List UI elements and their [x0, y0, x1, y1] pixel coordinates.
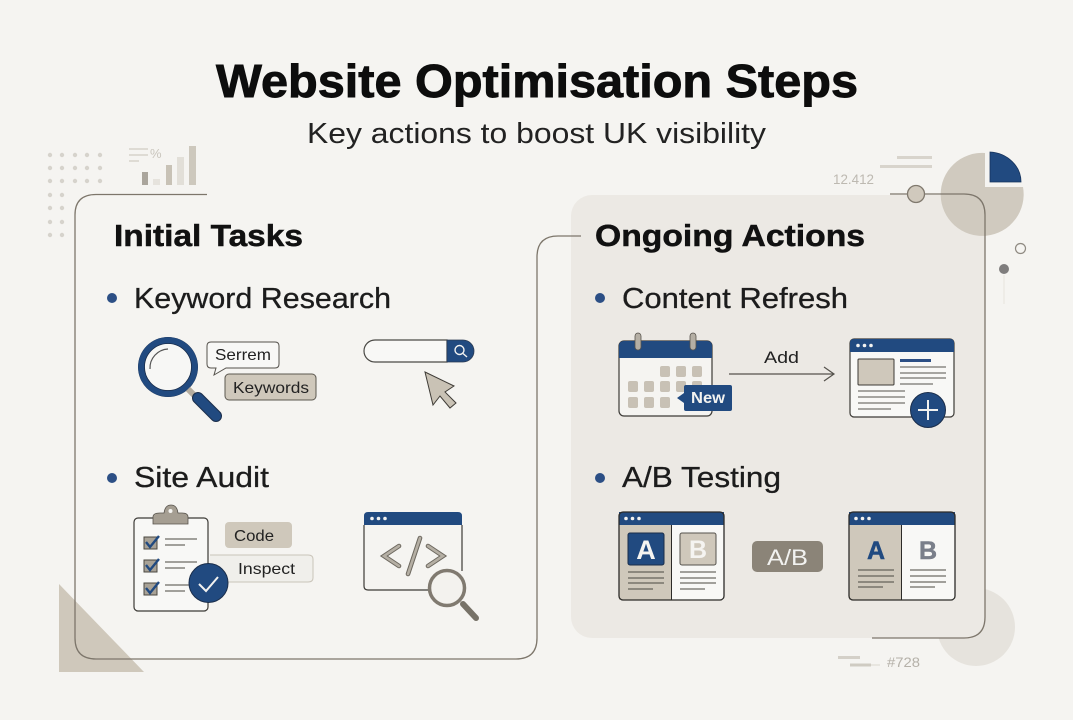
icon: A/B layout right: A	[867, 537, 885, 565]
decoration: small circles	[999, 244, 1026, 304]
subtitle: Key actions to boost UK visibility	[307, 118, 767, 150]
icon: magnifying glass	[138, 337, 216, 416]
decoration: code number #728: #728	[887, 654, 920, 670]
panel outline: ongoing actions	[872, 194, 985, 638]
label: keyword research: Keyword Research	[134, 283, 391, 315]
icon: clipboard checklist	[134, 505, 208, 611]
icon: calendar	[619, 333, 712, 416]
icon: search bar	[364, 340, 474, 362]
heading: initial tasks: Initial Tasks	[114, 218, 303, 253]
badge: New	[677, 385, 732, 411]
icon: cursor arrow	[425, 372, 456, 408]
icon: check badge	[189, 564, 228, 602]
badge: A/B: A/B	[767, 545, 808, 570]
bullet: keyword research	[107, 293, 117, 303]
bullet: site audit	[107, 473, 117, 483]
decoration: pie chart	[941, 152, 1024, 236]
speech bubble: Serrem: Serrem	[215, 347, 271, 364]
tag: Keywords: Keywords	[233, 380, 309, 397]
bullet: content refresh	[595, 293, 605, 303]
heading: ongoing actions: Ongoing Actions	[595, 218, 865, 253]
label: site audit: Site Audit	[134, 462, 269, 494]
icon: plus badge	[910, 392, 946, 428]
decoration: mini bar chart	[129, 146, 196, 185]
icon: code browser window	[364, 512, 462, 590]
decoration: lines near number	[880, 156, 932, 168]
decoration: bottom right circle	[937, 588, 1015, 666]
panel: ongoing actions background	[571, 195, 985, 638]
icon: A/B layout left	[619, 512, 724, 600]
badge: New: New	[691, 390, 726, 407]
decoration: corner triangle	[59, 584, 144, 672]
icon: A/B layout right	[849, 512, 955, 600]
decoration: dot grid	[48, 153, 102, 237]
tag: Code: Code	[234, 528, 274, 545]
decoration: code number #728	[838, 654, 920, 670]
tag: Code	[225, 522, 292, 548]
icon: A/B layout left: B	[689, 536, 707, 564]
title: Website Optimisation Steps	[216, 55, 858, 107]
decoration: connector node	[908, 186, 924, 202]
speech bubble: Serrem	[207, 342, 279, 375]
decoration: mini bar chart: %	[150, 146, 162, 161]
icon: web page with content	[850, 339, 954, 417]
badge: A/B	[752, 541, 823, 572]
icon: inspecting magnifier	[430, 570, 476, 618]
decoration: number 12.412: 12.412	[833, 171, 874, 187]
tag: Inspect: Inspect	[238, 561, 296, 578]
bullet: a/b testing	[595, 473, 605, 483]
label: content refresh: Content Refresh	[622, 283, 848, 315]
icon: A/B layout right: B	[919, 537, 937, 565]
panel: ongoing actions	[595, 218, 955, 600]
label: a/b testing: A/B Testing	[622, 462, 781, 494]
tag: Inspect	[210, 555, 313, 582]
label: Add: Add	[764, 348, 799, 367]
panel: initial tasks	[107, 218, 476, 618]
arrow: calendar to page	[729, 367, 834, 381]
panel outline: initial tasks	[75, 194, 581, 659]
tag: Keywords	[225, 374, 316, 400]
icon: A/B layout left: A	[636, 535, 656, 565]
